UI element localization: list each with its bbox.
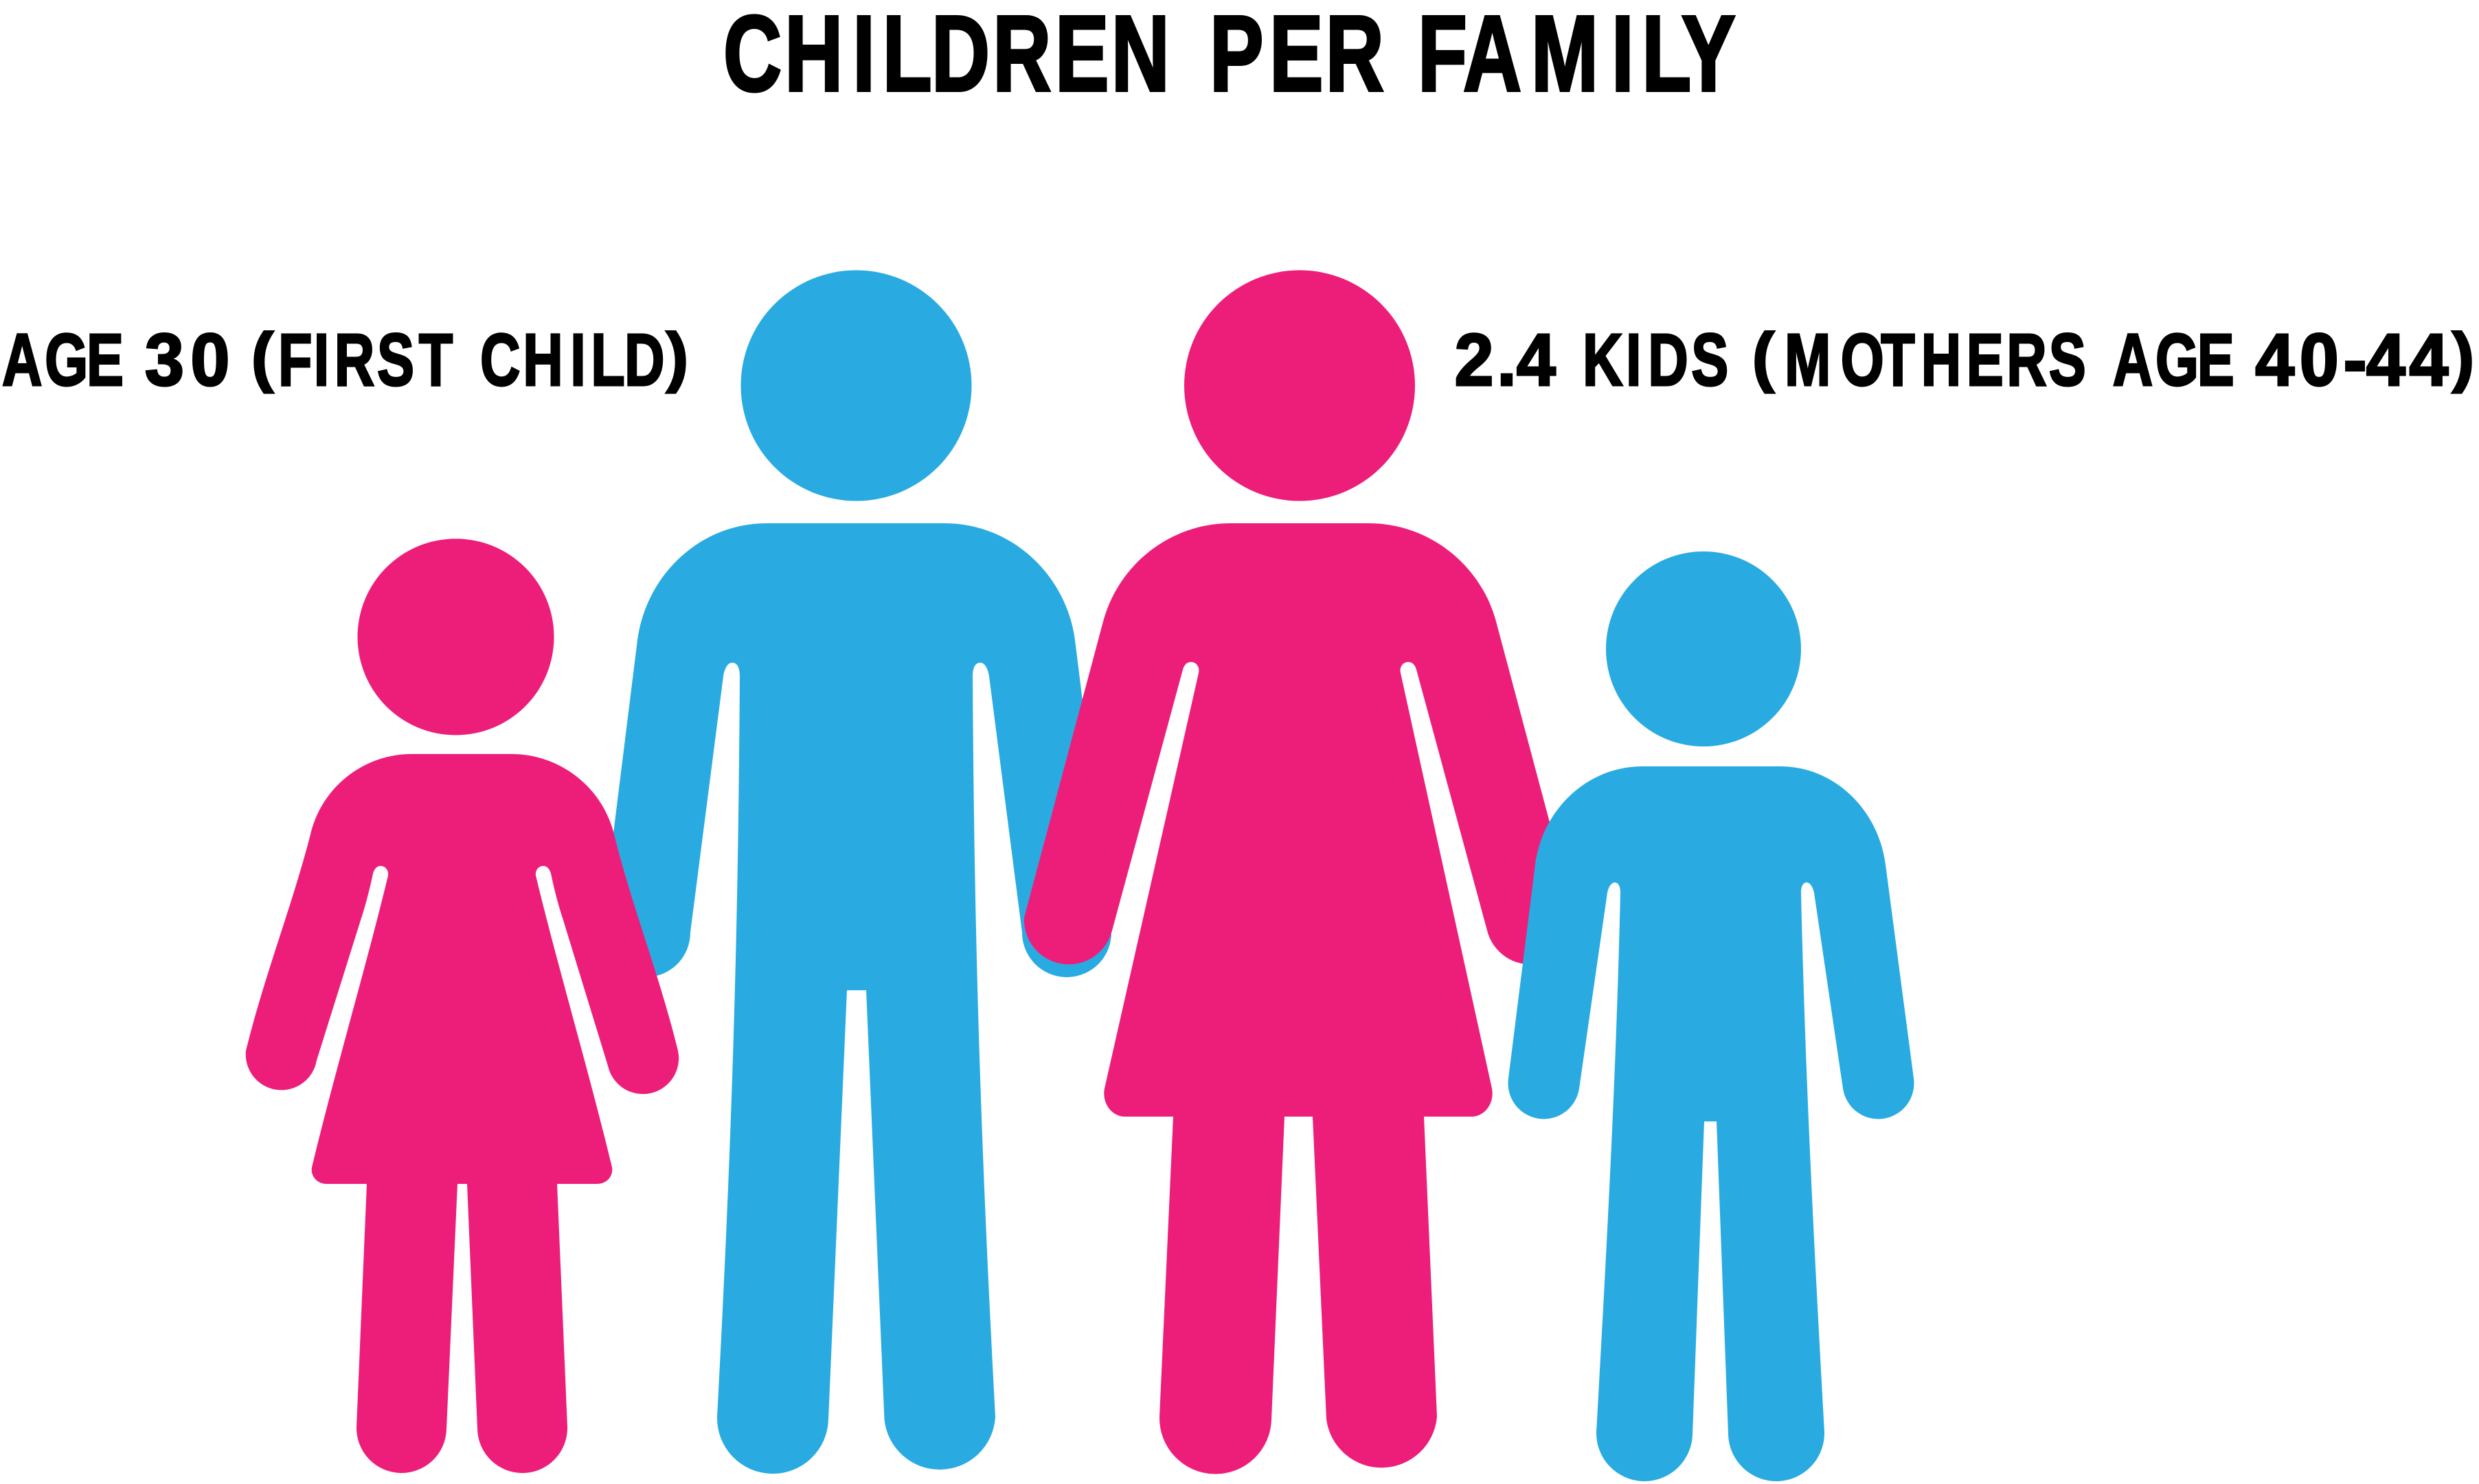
label: age at first child: CHILD <box>480 319 664 402</box>
mother body <box>1024 523 1575 1474</box>
label: kids per mother: 2.4 <box>1455 319 1556 402</box>
label: kids per mother: KIDS <box>1583 319 1728 402</box>
label: kids per mother: MOTHERS <box>1785 319 2086 402</box>
label: kids per mother <box>1455 319 2474 402</box>
label: kids per mother: ) <box>2452 320 2474 393</box>
label: age at first child: 30 <box>145 319 229 402</box>
figure: father (blue) <box>601 271 1111 1474</box>
mother head <box>1184 271 1415 501</box>
label: age at first child: ) <box>666 320 688 393</box>
label: kids per mother: 40-44 <box>2255 319 2449 402</box>
label: age at first child <box>2 319 688 402</box>
label: kids per mother: AGE <box>2113 319 2234 402</box>
figure: daughter (pink) <box>246 538 679 1473</box>
son head <box>1606 551 1801 746</box>
label: kids per mother: ( <box>1752 320 1774 393</box>
daughter body <box>246 754 679 1473</box>
father head <box>740 271 971 501</box>
label: age at first child: FIRST <box>278 319 453 402</box>
figure: son (blue) <box>1508 551 1914 1481</box>
label: age at first child: AGE <box>2 319 124 402</box>
figure: mother (pink) <box>1024 271 1575 1474</box>
daughter head <box>357 538 554 735</box>
label: age at first child: ( <box>251 320 273 393</box>
son body <box>1508 766 1914 1481</box>
father body <box>601 523 1111 1474</box>
